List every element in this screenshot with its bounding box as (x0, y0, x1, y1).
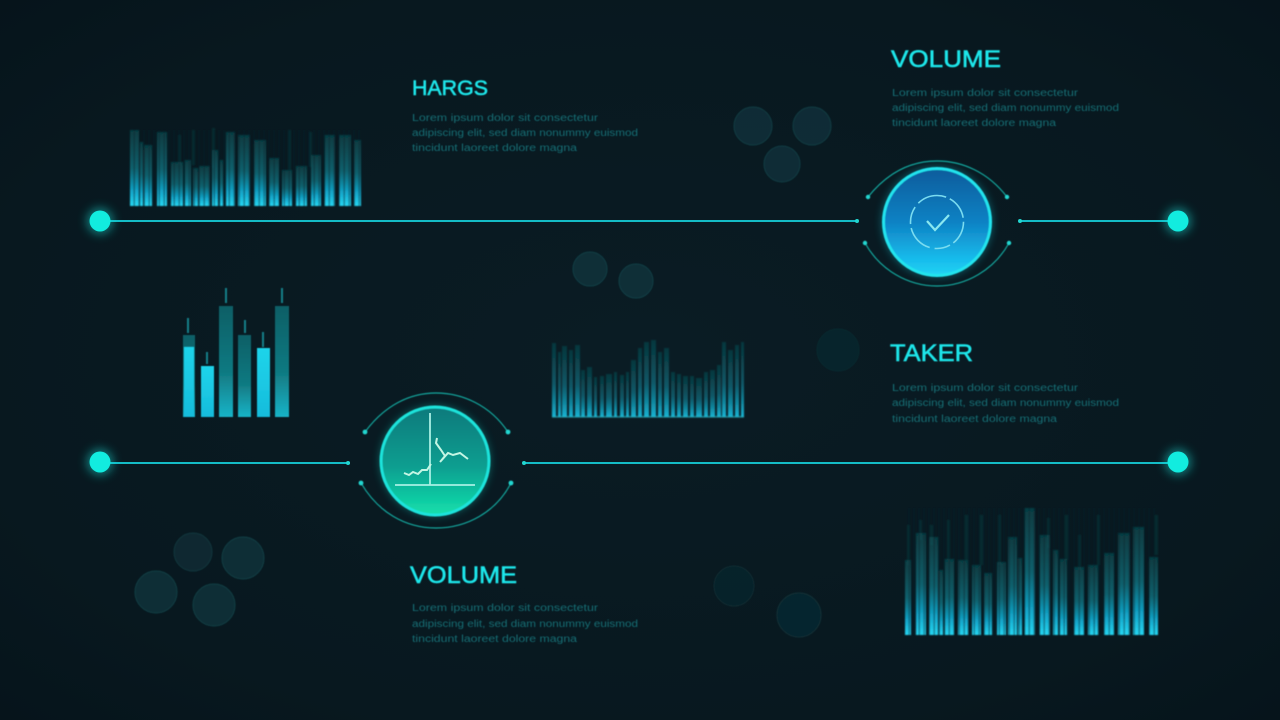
heading: HARGS: HARGS (412, 77, 488, 100)
bottom timeline (87, 449, 1191, 475)
text block: VOLUME top: Lorem ipsum dolor sit consectetur (892, 88, 1079, 99)
decorative circles group: lower middle (714, 566, 821, 637)
icon: blue check circle (863, 161, 1011, 286)
timeline node: bottom left (87, 449, 113, 475)
text block: HARGS: Lorem ipsum dolor sit consectetur (412, 113, 599, 124)
text block: VOLUME top: adipiscing elit, sed diam nonummy euismod (892, 103, 1119, 114)
icon ring arcs (359, 393, 513, 528)
decorative circles group: upper right (734, 107, 831, 182)
text block: TAKER: adipiscing elit, sed diam nonummy euismod (892, 398, 1119, 409)
text block: TAKER: tincidunt laoreet dolore magna (892, 414, 1058, 425)
text block: VOLUME top (892, 88, 1119, 129)
text block: HARGS (412, 113, 638, 154)
text block: HARGS: adipiscing elit, sed diam nonummy euismod (412, 128, 638, 139)
bar chart: top left (130, 128, 361, 206)
top timeline (87, 208, 1191, 234)
bar chart: bottom right (905, 508, 1158, 635)
decorative circles group: center (573, 252, 859, 371)
connector dots (346, 219, 1022, 465)
heading: TAKER: TAKER (890, 340, 973, 367)
text block: TAKER: Lorem ipsum dolor sit consectetur (892, 383, 1079, 394)
decorative circles group: lower left (135, 533, 264, 626)
text block: VOLUME bottom (412, 603, 638, 645)
heading: VOLUME bottom: VOLUME (410, 562, 517, 589)
timeline node: bottom right (1165, 449, 1191, 475)
icon ring arcs (863, 161, 1011, 286)
timeline node: top left (87, 208, 113, 234)
bar chart: center (552, 340, 744, 418)
text block: VOLUME bottom: Lorem ipsum dolor sit consectetur (412, 603, 599, 614)
text block: TAKER (892, 383, 1119, 425)
text block: VOLUME bottom: tincidunt laoreet dolore magna (412, 634, 578, 645)
candlestick chart (183, 288, 289, 417)
icon: green chart circle (359, 393, 513, 528)
heading: VOLUME top: VOLUME (891, 46, 1001, 73)
text block: VOLUME bottom: adipiscing elit, sed diam nonummy euismod (412, 619, 638, 630)
text block: HARGS: tincidunt laoreet dolore magna (412, 143, 578, 154)
timeline node: top right (1165, 208, 1191, 234)
text block: VOLUME top: tincidunt laoreet dolore magna (892, 118, 1057, 129)
